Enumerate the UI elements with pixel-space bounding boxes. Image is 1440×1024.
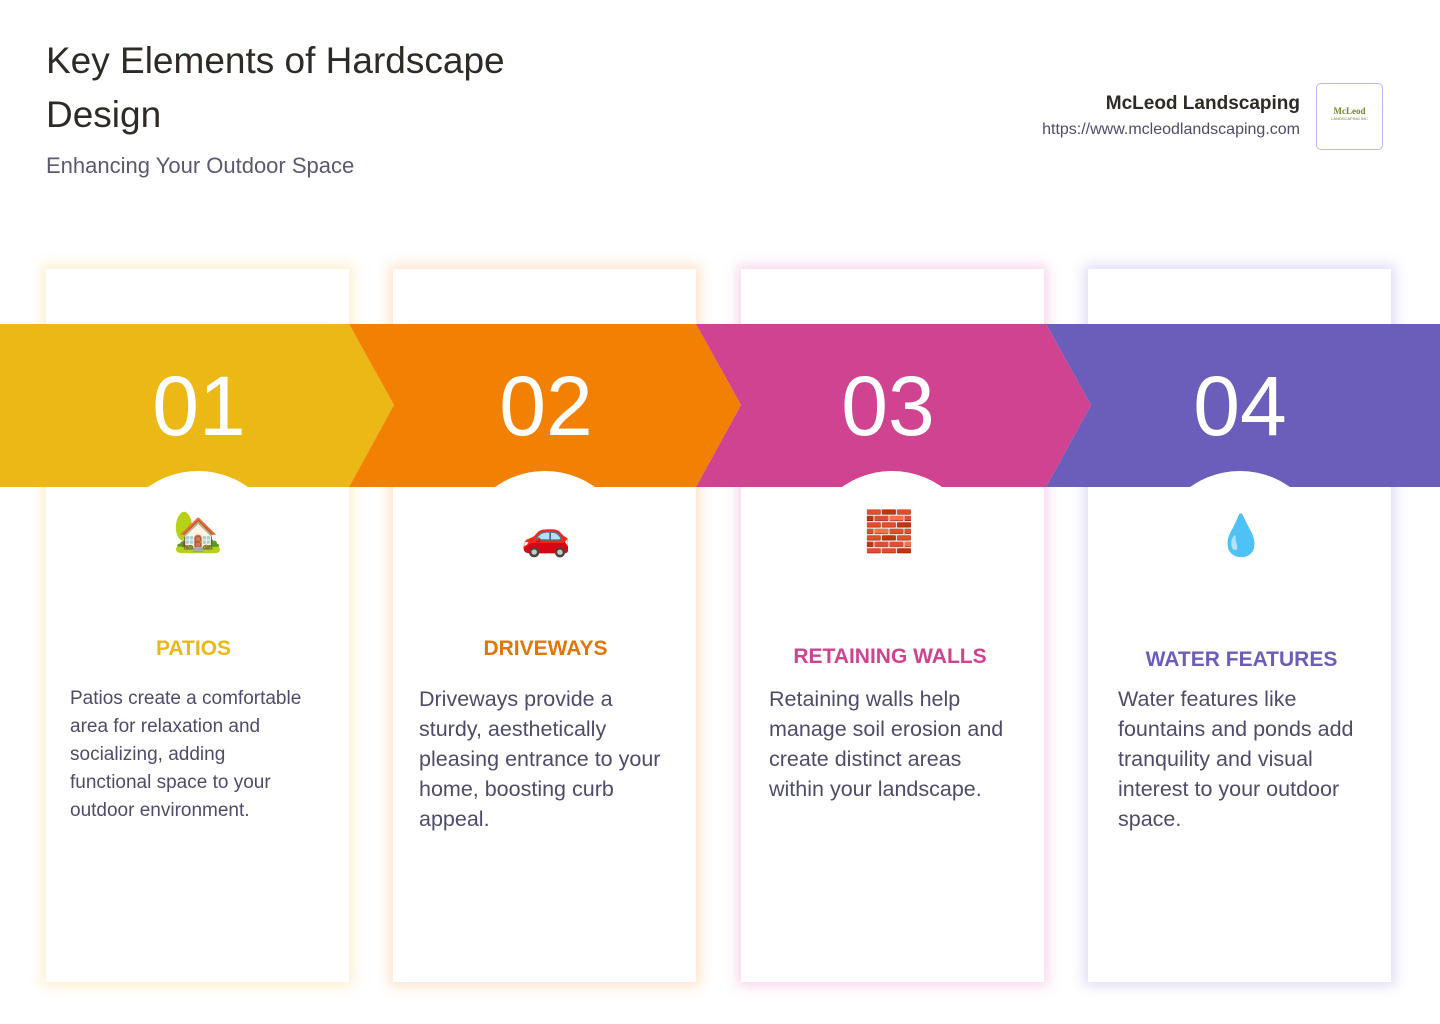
heading: retaining walls: RETAINING WALLS (793, 645, 987, 668)
card 1 (46, 269, 349, 982)
logo: LANDSCAPING INC (1331, 116, 1368, 121)
brand block (1042, 93, 1300, 138)
brand block: https://www.mcleodlandscaping.com (1042, 121, 1300, 138)
heading: water features: WATER FEATURES (1146, 648, 1337, 671)
icon: car: 🚗 (521, 512, 571, 559)
card 2 (393, 269, 696, 982)
icon: house: 🏡 (173, 508, 223, 555)
arrow band: 01 (152, 359, 246, 453)
card 3 (741, 269, 1044, 982)
text: water features: Water features like fountains and ponds add tranquility and visual interest to your outdoor space. (1118, 687, 1354, 831)
text: retaining walls: Retaining walls help manage soil erosion and create distinct areas within your landscape. (769, 687, 1003, 801)
arrow band (0, 324, 1440, 487)
title: Key Elements of Hardscape Design (46, 40, 505, 135)
text: driveways: Driveways provide a sturdy, aesthetically pleasing entrance to your home, boosting curb appeal. (419, 687, 660, 831)
subtitle: Enhancing Your Outdoor Space (46, 153, 354, 178)
icon: brick: 🧱 (864, 508, 914, 555)
brand block: McLeod Landscaping (1106, 93, 1300, 114)
icon: water drop: 💧 (1216, 512, 1266, 559)
text: patios: Patios create a comfortable area for relaxation and socializing, adding functional space to your outdoor environment. (70, 688, 301, 821)
arrow band: 03 (841, 359, 935, 453)
logo: McLeod (1334, 106, 1366, 116)
arrow band: 02 (499, 359, 593, 453)
arrow band: 04 (1193, 359, 1287, 453)
heading: patios: PATIOS (156, 637, 231, 660)
heading: driveways: DRIVEWAYS (483, 637, 608, 660)
card 4 (1088, 269, 1391, 982)
logo (1316, 83, 1383, 150)
